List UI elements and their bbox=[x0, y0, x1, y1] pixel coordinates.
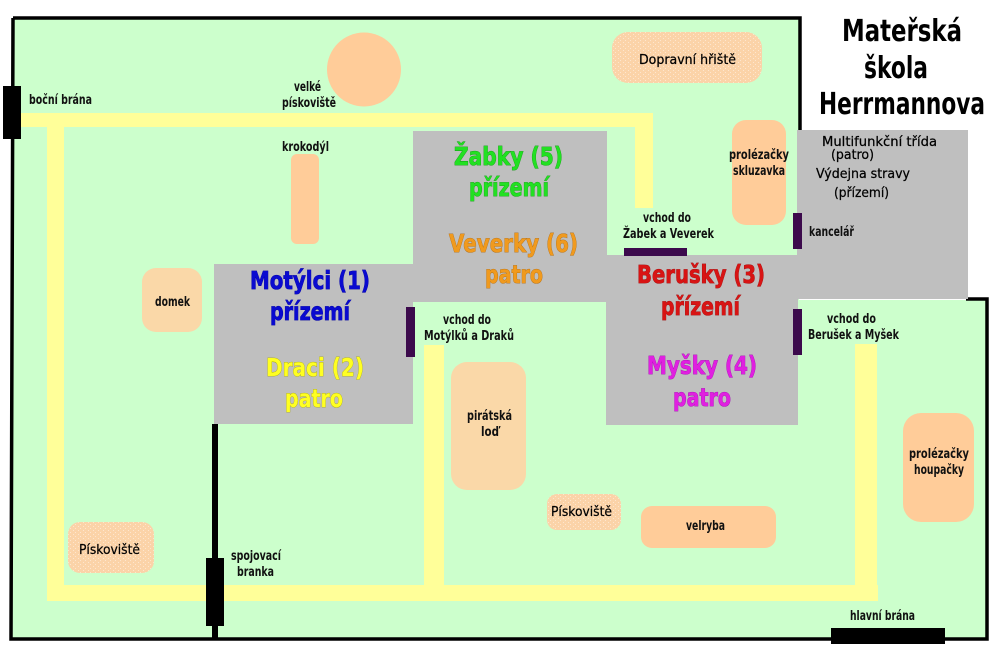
label: connecting gate: branka bbox=[237, 564, 274, 580]
entrance: Berušky and Myšky bbox=[793, 309, 802, 355]
label: large sandpit: velké bbox=[294, 79, 321, 95]
large sandpit bbox=[327, 32, 401, 106]
label: sandpit centre: Pískoviště bbox=[551, 504, 612, 520]
class: Berušky: Berušky (3) bbox=[637, 260, 765, 289]
label: swings: prolézačky bbox=[909, 446, 969, 462]
label: entrance Motýlci and Draci bbox=[424, 312, 514, 344]
class: Žabky bbox=[454, 142, 563, 202]
label: large sandpit bbox=[282, 79, 336, 111]
label: slide bbox=[729, 147, 789, 179]
class: Myšky bbox=[647, 351, 757, 412]
whale bbox=[641, 506, 776, 548]
label: little house: domek bbox=[155, 294, 191, 310]
label: entrance Berušky and Myšky: Berušek a Myšek bbox=[808, 327, 900, 343]
label: multifunctional room and canteen: (patro) bbox=[831, 147, 874, 163]
label: entrance Berušky and Myšky bbox=[808, 311, 900, 343]
label: entrance Žabky and Veverky: Žabek a Veverek bbox=[623, 225, 715, 242]
class: Veverky bbox=[449, 229, 578, 289]
class: Draci: patro bbox=[285, 384, 343, 413]
yellow paths bbox=[15, 113, 878, 601]
traffic playground bbox=[612, 32, 762, 83]
label: large sandpit: pískoviště bbox=[282, 95, 336, 111]
label: side gate: boční brána bbox=[29, 92, 92, 108]
label: slide: skluzavka bbox=[733, 163, 785, 179]
label: swings: houpačky bbox=[914, 462, 964, 478]
label: pirate ship: pirátská bbox=[467, 408, 512, 424]
class: Draci: Draci (2) bbox=[266, 353, 364, 382]
climbing frame and swings bbox=[903, 413, 974, 522]
pirate ship bbox=[451, 362, 526, 490]
label: multifunctional room and canteen: (přízemí) bbox=[834, 185, 889, 201]
label: traffic playground: Dopravní hřiště bbox=[639, 52, 736, 68]
sandpit centre bbox=[547, 494, 621, 530]
label: multifunctional room and canteen: Výdejna stravy bbox=[816, 166, 910, 182]
label: pirate ship bbox=[467, 408, 512, 440]
label: connecting gate bbox=[231, 548, 282, 580]
class: Motýlci bbox=[250, 266, 370, 326]
class: Žabky: Žabky (5) bbox=[454, 142, 563, 171]
label: entrance Žabky and Veverky bbox=[623, 210, 715, 242]
climbing frame and slide bbox=[732, 120, 786, 225]
label: whale: velryba bbox=[686, 518, 725, 534]
label: multifunctional room and canteen: Multifunkční třída bbox=[822, 134, 937, 150]
class: Motýlci: přízemí bbox=[270, 297, 351, 326]
class: Veverky: patro bbox=[485, 260, 543, 289]
label: entrance Motýlci and Draci: vchod do bbox=[443, 312, 491, 328]
label: entrance Motýlci and Draci: Motýlků a Draků bbox=[424, 327, 514, 344]
label: entrance Žabky and Veverky: vchod do bbox=[643, 210, 691, 226]
class: Myšky: Myšky (4) bbox=[647, 351, 757, 380]
entrance: office bbox=[793, 213, 802, 249]
class: Veverky: Veverky (6) bbox=[449, 229, 578, 258]
label: entrance Berušky and Myšky: vchod do bbox=[827, 311, 876, 327]
class: Žabky: přízemí bbox=[469, 173, 550, 202]
school building bbox=[214, 130, 968, 425]
label: slide: prolézačky bbox=[729, 147, 789, 163]
class: Myšky: patro bbox=[673, 383, 731, 412]
sandpit west bbox=[68, 522, 154, 573]
title: Mateřská bbox=[842, 14, 962, 49]
crocodile bbox=[291, 154, 319, 244]
label: multifunctional room and canteen bbox=[816, 134, 937, 201]
label: office: kancelář bbox=[809, 224, 854, 240]
entrance: Motýlci and Draci bbox=[406, 307, 415, 357]
class: Draci bbox=[266, 353, 364, 413]
side gate bbox=[3, 86, 21, 139]
entrance: Žabky and Veverky bbox=[624, 248, 687, 256]
class: Motýlci: Motýlci (1) bbox=[250, 266, 370, 295]
label: crocodile: krokodýl bbox=[282, 139, 329, 155]
class: Berušky: přízemí bbox=[661, 292, 741, 321]
little house bbox=[142, 268, 202, 332]
label: pirate ship: loď bbox=[481, 424, 501, 440]
title: škola bbox=[864, 51, 928, 86]
label: sandpit west: Pískoviště bbox=[79, 542, 140, 558]
label: swings bbox=[909, 446, 969, 478]
title bbox=[819, 14, 985, 122]
connecting fence with gate bbox=[206, 424, 224, 639]
label: connecting gate: spojovací bbox=[231, 548, 282, 564]
main gate bbox=[831, 628, 945, 644]
label: main gate: hlavní brána bbox=[850, 608, 915, 624]
class: Berušky bbox=[637, 260, 765, 321]
